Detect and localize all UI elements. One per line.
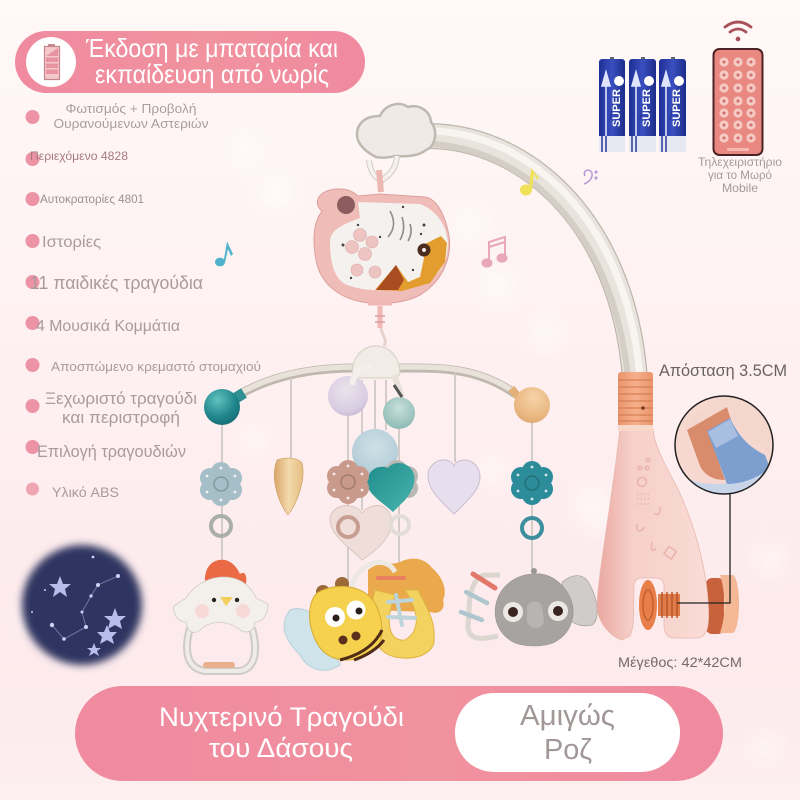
battery icon <box>26 37 76 87</box>
remote control <box>714 49 762 155</box>
pink heart pendant <box>330 505 392 560</box>
peach ball right <box>508 386 550 423</box>
feature: lighting and projection: Φωτισμός + Προβολή <box>66 101 196 116</box>
teal ball left <box>204 388 247 425</box>
grey flower behind teal heart <box>376 460 418 504</box>
battery 2: SUPER <box>641 89 653 127</box>
remote caption <box>698 155 782 195</box>
icon: pink note <box>482 237 506 267</box>
bottom banner pill <box>75 686 723 781</box>
bee wing <box>284 609 340 670</box>
paw buttons <box>346 228 381 278</box>
banner left text: του Δάσους <box>209 733 353 763</box>
feature: children's songs: 11 παιδικές τραγούδια <box>30 273 203 293</box>
elephant ear <box>562 576 597 626</box>
pale blue ball <box>352 429 398 475</box>
banner right text <box>520 700 615 766</box>
icon: blue note <box>215 242 233 266</box>
title text: Έκδοση με μπαταρία και <box>85 33 338 63</box>
starry projection circle <box>22 545 142 665</box>
title text <box>85 33 338 89</box>
hanging arm <box>237 367 514 396</box>
mobile arch arm <box>428 131 640 378</box>
pink flower <box>327 460 369 504</box>
banner right text: Ροζ <box>544 734 592 766</box>
callout line to inset <box>677 494 730 603</box>
spiral connector <box>368 302 392 346</box>
remote caption: Mobile <box>722 181 758 195</box>
size label: Μέγεθος: 42*42CM <box>618 654 742 670</box>
remote caption: για το Μωρό <box>708 168 772 182</box>
bee antennae <box>316 585 330 599</box>
teal flower <box>511 461 553 505</box>
device face <box>330 202 448 290</box>
chick comb <box>205 560 246 584</box>
pacifier <box>473 574 495 588</box>
elephant body <box>495 574 573 646</box>
feature: detachable pendant: Αποσπώμενο κρεμαστό στομαχιού <box>51 359 261 374</box>
elephant toy <box>461 568 597 646</box>
hanging balls <box>204 376 550 475</box>
batteries <box>599 57 686 152</box>
purple heart pendant <box>428 460 480 514</box>
hanging hearts and acorn <box>274 458 480 560</box>
bee toy <box>284 577 384 670</box>
cloud top <box>357 104 435 192</box>
banner right text: Αμιγώς <box>520 700 615 732</box>
teal heart pendant <box>367 463 414 512</box>
speaker <box>337 196 355 214</box>
music box device <box>314 189 450 346</box>
lion teether <box>368 559 445 658</box>
feature: music tracks: 4 Μουσικά Κομμάτια <box>36 318 180 335</box>
strings <box>222 372 532 590</box>
feature: separate song and rotation: και περιστροφή <box>62 408 180 427</box>
feature: separate song and rotation: Ξεχωριστό τραγούδι <box>45 389 197 408</box>
remote caption: Τηλεχειριστήριο <box>698 155 782 169</box>
banner left text: Νυχτερινό Τραγούδι <box>159 702 404 732</box>
icon: wifi signal <box>725 22 751 41</box>
teether rings <box>211 516 542 538</box>
base body <box>597 429 709 640</box>
icon: purple bass clef <box>584 170 597 184</box>
feature bullet list <box>26 101 261 500</box>
feature: lighting and projection <box>54 101 209 131</box>
ribbed orange collar <box>618 372 653 431</box>
lavender ball <box>328 376 368 416</box>
music notes <box>215 168 597 267</box>
icon: yellow note <box>520 168 539 196</box>
banner left text <box>159 702 404 763</box>
feature: separate song and rotation <box>45 389 197 427</box>
chick body <box>174 577 268 632</box>
base embossed pattern <box>637 458 676 559</box>
sound waves <box>388 211 411 241</box>
hook <box>369 156 397 180</box>
forest scene <box>375 236 447 291</box>
centre hub <box>352 346 402 397</box>
battery 1: SUPER <box>611 89 623 127</box>
orange screw <box>639 580 680 630</box>
blue-grey flower <box>200 462 242 506</box>
chick handle <box>187 628 255 671</box>
battery 3: SUPER <box>671 89 683 127</box>
clamp base <box>597 429 739 640</box>
distance label: Απόσταση 3.5CM <box>659 362 787 380</box>
feature: stories: Ιστορίες <box>42 234 101 251</box>
feature: emperors 4801: Αυτοκρατορίες 4801 <box>40 192 144 206</box>
feature: song selection: Επιλογή τραγουδιών <box>37 443 186 461</box>
white ring and rattle <box>352 562 415 625</box>
feature: content 4828: Περιεχόμενο 4828 <box>30 149 128 163</box>
small mint ball <box>383 397 415 429</box>
acorn pendant <box>274 458 303 515</box>
right knob <box>706 575 739 634</box>
elephant handle <box>468 575 500 638</box>
chick rattle <box>174 560 268 671</box>
top title pill <box>15 31 365 93</box>
teether flowers <box>200 460 553 506</box>
title text: εκπαίδευση από νωρίς <box>95 59 329 89</box>
bee body <box>310 586 382 660</box>
feature: lighting and projection: Ουρανούμενων Αστεριών <box>54 116 209 131</box>
inset detail circle <box>674 395 774 495</box>
feature: ABS material: Υλικό ABS <box>52 484 119 500</box>
banner white pill <box>455 693 680 772</box>
